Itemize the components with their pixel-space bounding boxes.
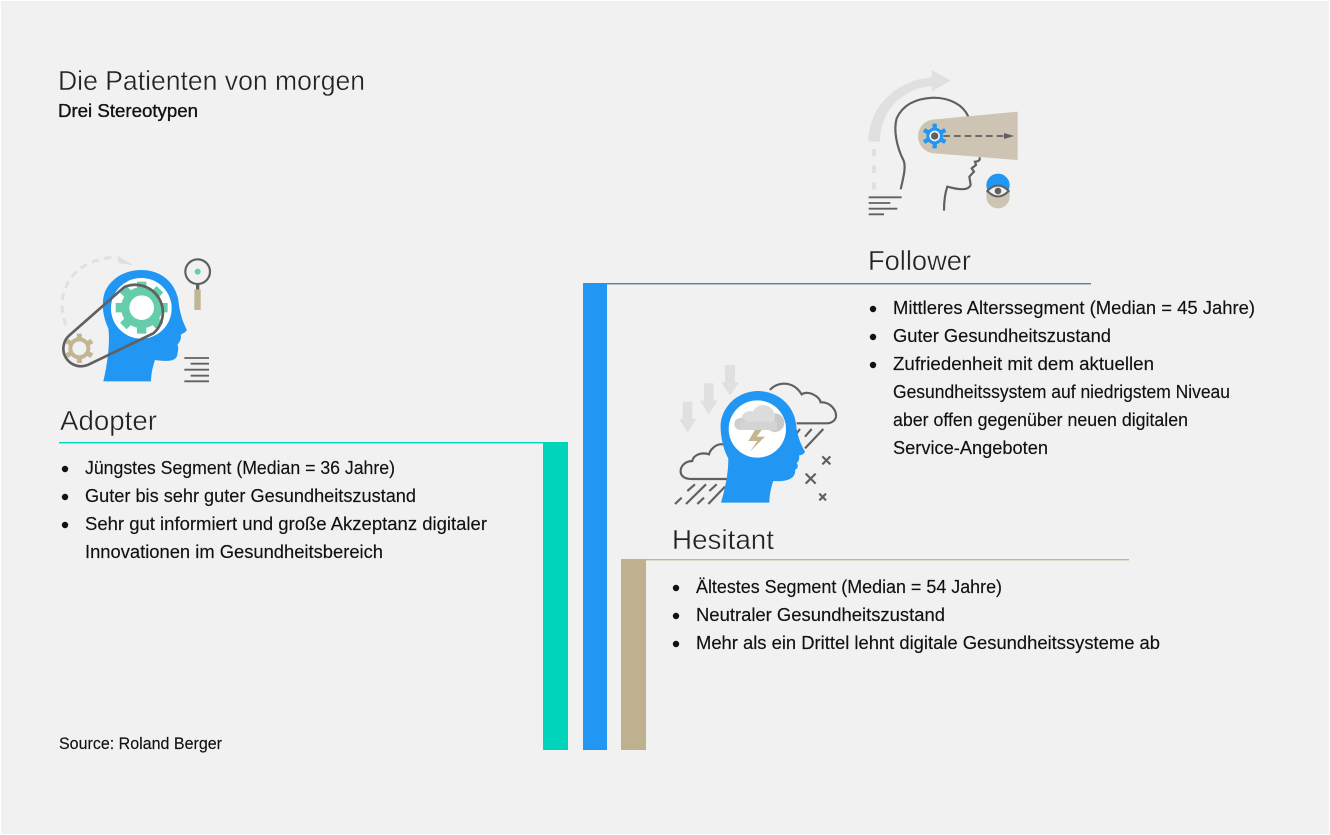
icon: follower head with vision beam [868,70,1018,214]
text block: Hesitant bullets: Ältestes Segment (Median = 54 Jahre) [696,577,1002,597]
text block: Follower bullets: Zufriedenheit mit dem aktuellen [893,354,1154,374]
divider and bar: Follower [583,283,1091,750]
text block: Adopter bullets: Jüngstes Segment (Median = 36 Jahre) [85,458,395,478]
text block: Adopter bullets [62,458,487,562]
icon: adopter head with gears [62,256,210,381]
text block: Follower bullets: Service-Angeboten [893,438,1048,458]
heading: Adopter: Adopter [60,405,157,436]
text block: Adopter bullets: Sehr gut informiert und große Akzeptanz digitaler [85,514,487,534]
text block: Hesitant bullets [673,577,1160,653]
subtitle: Drei Stereotypen [58,101,198,121]
heading: Hesitant: Hesitant [672,524,774,555]
icon: hesitant head with storm clouds [675,365,836,504]
text block: Adopter bullets: Guter bis sehr guter Gesundheitszustand [85,486,416,506]
text block: Follower bullets: aber offen gegenüber neuen digitalen [893,410,1188,430]
text block: Follower bullets [870,298,1255,458]
divider and bar: Hesitant [621,559,1129,750]
text block: Hesitant bullets: Neutraler Gesundheitszustand [696,605,945,625]
source note: Source: Roland Berger [59,734,222,753]
text block: Follower bullets: Gesundheitssystem auf niedrigstem Niveau [893,382,1230,402]
text block: Follower bullets: Mittleres Alterssegment (Median = 45 Jahre) [893,298,1255,318]
text block: Hesitant bullets: Mehr als ein Drittel lehnt digitale Gesundheitssysteme ab [696,633,1160,653]
divider and bar: Adopter [59,442,568,750]
title: Die Patienten von morgen [58,65,365,96]
text block: Adopter bullets: Innovationen im Gesundheitsbereich [85,542,383,562]
heading: Follower: Follower [868,245,971,276]
text block: Follower bullets: Guter Gesundheitszustand [893,326,1111,346]
